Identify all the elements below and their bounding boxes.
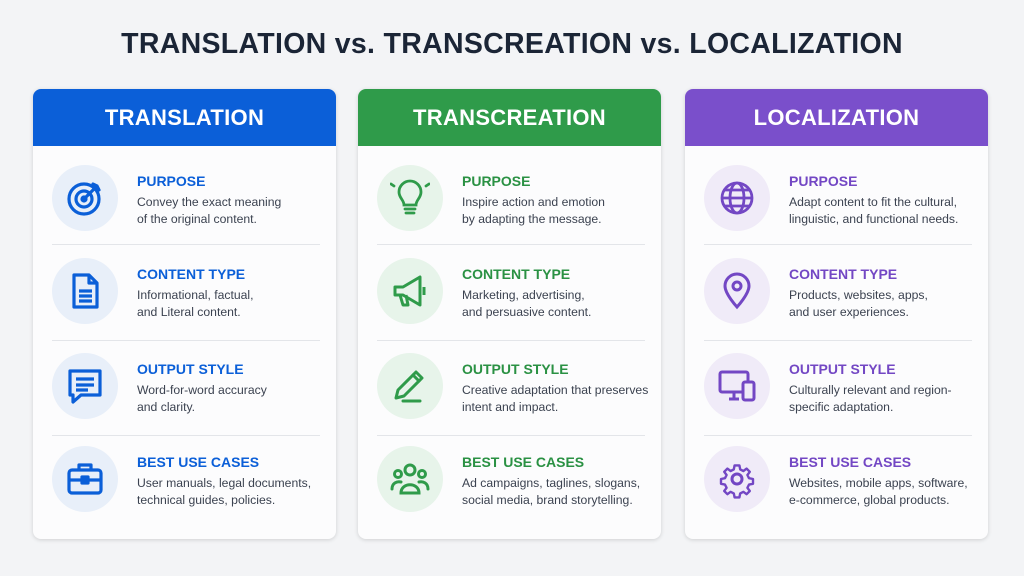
icon: lightbulb <box>377 165 443 231</box>
icon: devices <box>704 353 770 419</box>
row: output style: Culturally relevant and region- <box>789 383 952 397</box>
heading: localization <box>685 89 988 146</box>
icon: target <box>52 165 118 231</box>
row: content type: CONTENT TYPE <box>137 266 245 282</box>
panel: localization <box>685 89 988 539</box>
row: content type: Products, websites, apps, <box>789 288 928 302</box>
row: content type <box>377 258 591 324</box>
row: output style: and clarity. <box>137 400 195 414</box>
row: output style <box>52 353 267 419</box>
row: purpose: PURPOSE <box>462 173 530 189</box>
row: purpose: Adapt content to fit the cultural, <box>789 195 957 209</box>
row: best use cases: BEST USE CASES <box>462 454 584 470</box>
row: best use cases: Ad campaigns, taglines, slogans, <box>462 476 640 490</box>
panel: translation <box>33 89 336 539</box>
row: output style: OUTPUT STYLE <box>789 361 896 377</box>
row: output style: intent and impact. <box>462 400 558 414</box>
row: best use cases: social media, brand storytelling. <box>462 493 633 507</box>
row: best use cases <box>52 446 311 512</box>
row: purpose: Convey the exact meaning <box>137 195 281 209</box>
row: best use cases: BEST USE CASES <box>789 454 911 470</box>
heading: translation <box>33 89 336 146</box>
row: output style: Creative adaptation that preserves <box>462 383 648 397</box>
icon: gear <box>704 446 770 512</box>
row: purpose: PURPOSE <box>789 173 857 189</box>
row: content type: CONTENT TYPE <box>789 266 897 282</box>
icon: globe <box>704 165 770 231</box>
icon: people <box>377 446 443 512</box>
row: content type: and Literal content. <box>137 305 241 319</box>
heading: transcreation <box>358 89 661 146</box>
row: purpose: Inspire action and emotion <box>462 195 605 209</box>
row: purpose <box>377 165 605 231</box>
row: output style <box>704 353 952 419</box>
row: best use cases: BEST USE CASES <box>137 454 259 470</box>
row: purpose: linguistic, and functional needs. <box>789 212 958 226</box>
row: best use cases <box>704 446 968 512</box>
icon: briefcase <box>52 446 118 512</box>
row: content type <box>52 258 254 324</box>
row: output style: Word-for-word accuracy <box>137 383 267 397</box>
row: purpose: of the original content. <box>137 212 257 226</box>
row: best use cases: Websites, mobile apps, software, <box>789 476 968 490</box>
heading: translation: TRANSLATION <box>105 105 264 130</box>
row: output style: OUTPUT STYLE <box>462 361 569 377</box>
row: content type: Informational, factual, <box>137 288 254 302</box>
row: content type: and persuasive content. <box>462 305 591 319</box>
icon: location pin <box>704 258 770 324</box>
row: purpose <box>52 165 281 231</box>
row: content type <box>704 258 928 324</box>
row: purpose: PURPOSE <box>137 173 205 189</box>
row: best use cases: e-commerce, global products. <box>789 493 950 507</box>
row: output style: OUTPUT STYLE <box>137 361 244 377</box>
icon: chat <box>52 353 118 419</box>
heading: localization: LOCALIZATION <box>754 105 919 130</box>
row: output style: specific adaptation. <box>789 400 893 414</box>
row: content type: CONTENT TYPE <box>462 266 570 282</box>
row: purpose <box>704 165 958 231</box>
row: output style <box>377 353 648 419</box>
row: content type: Marketing, advertising, <box>462 288 585 302</box>
panel: transcreation <box>358 89 661 539</box>
row: best use cases: technical guides, policies. <box>137 493 275 507</box>
row: content type: and user experiences. <box>789 305 909 319</box>
icon: document <box>52 258 118 324</box>
heading: transcreation: TRANSCREATION <box>413 105 606 130</box>
title: TRANSLATION vs. TRANSCREATION vs. LOCALIZATION <box>121 28 903 60</box>
row: purpose: by adapting the message. <box>462 212 602 226</box>
row: best use cases <box>377 446 640 512</box>
row: best use cases: User manuals, legal documents, <box>137 476 311 490</box>
icon: megaphone <box>377 258 443 324</box>
icon: pencil <box>377 353 443 419</box>
